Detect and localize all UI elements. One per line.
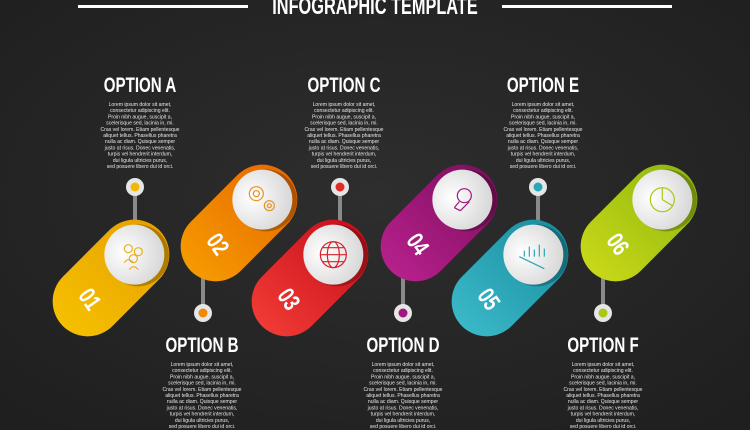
option B [162, 332, 242, 430]
option F: justo at risus. Donec venenatis, [567, 405, 638, 411]
option C: nulla ac diam. Quisque semper [309, 139, 379, 145]
option C: justo at risus. Donec venenatis, [308, 145, 379, 151]
option C: Lorem ipsum dolor sit amet, [313, 102, 375, 108]
option B: scelerisque sed, lacinia in, mi. [168, 381, 236, 387]
option D: consectetur adipiscing elit. [373, 368, 433, 374]
option B: consectetur adipiscing elit. [172, 368, 232, 374]
option B: sed posuere libero dui id orci. [169, 424, 235, 430]
option D: justo at risus. Donec venenatis, [367, 405, 438, 411]
pill 02: 02 [201, 229, 234, 260]
option E: consectetur adipiscing elit. [513, 108, 573, 114]
option B: Cras vel lorem. Etiam pellentesque [162, 387, 242, 393]
option A: dui ligula ultricies purus, [113, 158, 167, 164]
option C: aliquet tellus. Phasellus pharetra [307, 133, 381, 139]
option E: justo at risus. Donec venenatis, [507, 145, 578, 151]
option B: dui ligula ultricies purus, [175, 418, 229, 424]
pill 06: 06 [601, 229, 634, 260]
option C [304, 72, 384, 170]
option A: OPTION A [104, 72, 176, 97]
option F: OPTION F [567, 332, 639, 357]
option D: OPTION D [366, 332, 440, 357]
option B: nulla ac diam. Quisque semper [167, 399, 237, 405]
option F [564, 332, 643, 430]
pill 06 [566, 150, 712, 296]
connector pins [126, 178, 612, 322]
option C: dui ligula ultricies purus, [317, 158, 371, 164]
option A: consectetur adipiscing elit. [110, 108, 170, 114]
option E: nulla ac diam. Quisque semper [508, 139, 578, 145]
pill 05: 05 [472, 284, 505, 315]
option D: Cras vel lorem. Etiam pellentesque [364, 387, 443, 393]
option D: Lorem ipsum dolor sit amet, [372, 362, 434, 368]
option A: justo at risus. Donec venenatis, [104, 145, 175, 151]
option A: turpis vel hendrerit interdum, [108, 152, 172, 158]
option C: sed posuere libero dui id orci. [311, 164, 377, 170]
option E: Cras vel lorem. Etiam pellentesque [504, 127, 583, 133]
option D: aliquet tellus. Phasellus pharetra [366, 393, 440, 399]
option E: Lorem ipsum dolor sit amet, [512, 102, 574, 108]
option D: scelerisque sed, lacinia in, mi. [369, 381, 437, 387]
option D: sed posuere libero dui id orci. [370, 424, 436, 430]
option A: sed posuere libero dui id orci. [107, 164, 173, 170]
option C: OPTION C [307, 72, 381, 97]
option B: turpis vel hendrerit interdum, [170, 412, 234, 418]
option B: justo at risus. Donec venenatis, [166, 405, 237, 411]
pill 04 [366, 150, 512, 296]
pill 05 [437, 205, 583, 351]
title [78, 0, 672, 20]
option E: sed posuere libero dui id orci. [510, 164, 576, 170]
option F: nulla ac diam. Quisque semper [568, 399, 638, 405]
option F: aliquet tellus. Phasellus pharetra [566, 393, 640, 399]
option B: aliquet tellus. Phasellus pharetra [165, 393, 239, 399]
option B: OPTION B [165, 332, 239, 357]
option F: consectetur adipiscing elit. [573, 368, 633, 374]
option A: aliquet tellus. Phasellus pharetra [103, 133, 177, 139]
option F: turpis vel hendrerit interdum, [571, 412, 635, 418]
option A [100, 72, 180, 170]
option D: Proin nibh augue, suscipit a, [371, 374, 435, 380]
option F: sed posuere libero dui id orci. [570, 424, 636, 430]
option C: consectetur adipiscing elit. [314, 108, 374, 114]
option A: nulla ac diam. Quisque semper [105, 139, 175, 145]
option A: scelerisque sed, lacinia in, mi. [106, 121, 174, 127]
option C: Proin nibh augue, suscipit a, [312, 114, 376, 120]
option D [364, 332, 443, 430]
option E: aliquet tellus. Phasellus pharetra [506, 133, 580, 139]
option E: turpis vel hendrerit interdum, [511, 152, 575, 158]
option E: OPTION E [507, 72, 579, 97]
option D: nulla ac diam. Quisque semper [368, 399, 438, 405]
option C: Cras vel lorem. Etiam pellentesque [304, 127, 384, 133]
option D: dui ligula ultricies purus, [376, 418, 430, 424]
option F: Lorem ipsum dolor sit amet, [572, 362, 634, 368]
option E: Proin nibh augue, suscipit a, [511, 114, 575, 120]
pill 04: 04 [401, 229, 434, 260]
option F: scelerisque sed, lacinia in, mi. [569, 381, 637, 387]
option E: scelerisque sed, lacinia in, mi. [509, 121, 577, 127]
option A: Cras vel lorem. Etiam pellentesque [100, 127, 180, 133]
pill 03: 03 [272, 284, 305, 315]
pill 02 [166, 150, 312, 296]
pill 01: 01 [73, 284, 106, 315]
option D: turpis vel hendrerit interdum, [371, 412, 435, 418]
pill 01 [38, 205, 184, 351]
option F: dui ligula ultricies purus, [576, 418, 630, 424]
option C: turpis vel hendrerit interdum, [312, 152, 376, 158]
option A: Lorem ipsum dolor sit amet, [109, 102, 171, 108]
option B: Lorem ipsum dolor sit amet, [171, 362, 233, 368]
option A: Proin nibh augue, suscipit a, [108, 114, 172, 120]
option E: dui ligula ultricies purus, [516, 158, 570, 164]
option C: scelerisque sed, lacinia in, mi. [310, 121, 378, 127]
option F: Proin nibh augue, suscipit a, [571, 374, 635, 380]
option F: Cras vel lorem. Etiam pellentesque [564, 387, 643, 393]
pill 03 [237, 205, 383, 351]
option B: Proin nibh augue, suscipit a, [170, 374, 234, 380]
option E [504, 72, 583, 170]
